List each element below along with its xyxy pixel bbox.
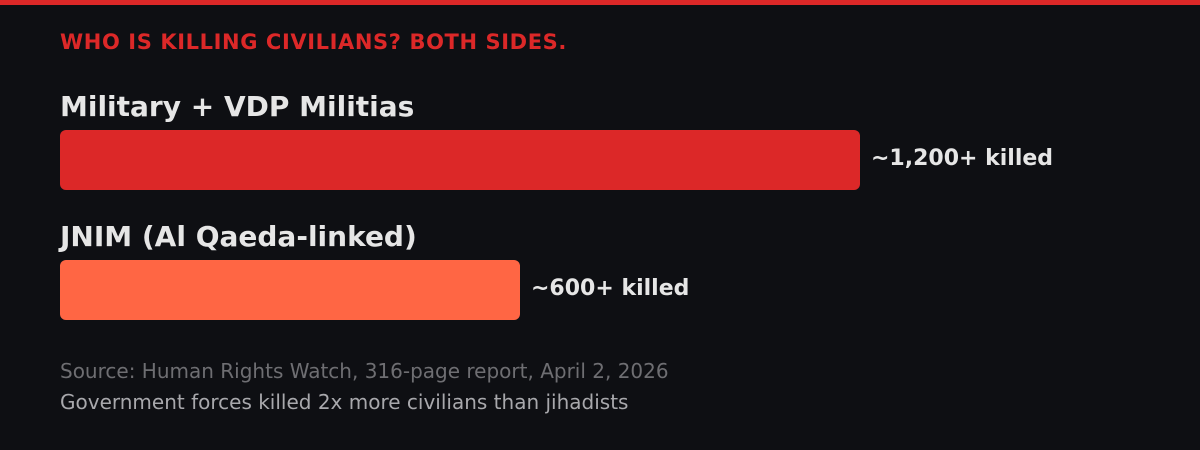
bar: military (60, 130, 860, 190)
heading: JNIM: JNIM (Al Qaeda-linked) (60, 220, 417, 253)
panel: JNIM row (58, 220, 689, 320)
note text: Government forces killed 2x more civilians than jihadists (60, 390, 628, 414)
panel: military row (60, 90, 1053, 190)
bar: JNIM (60, 260, 520, 320)
source text: Source: Human Rights Watch, 316-page report, April 2, 2026 (60, 359, 669, 383)
title: WHO IS KILLING CIVILIANS? BOTH SIDES. (60, 30, 567, 54)
value: JNIM: ~600+ killed (531, 276, 689, 301)
heading: military: Military + VDP Militias (60, 90, 414, 123)
value: military: ~1,200+ killed (871, 146, 1053, 171)
